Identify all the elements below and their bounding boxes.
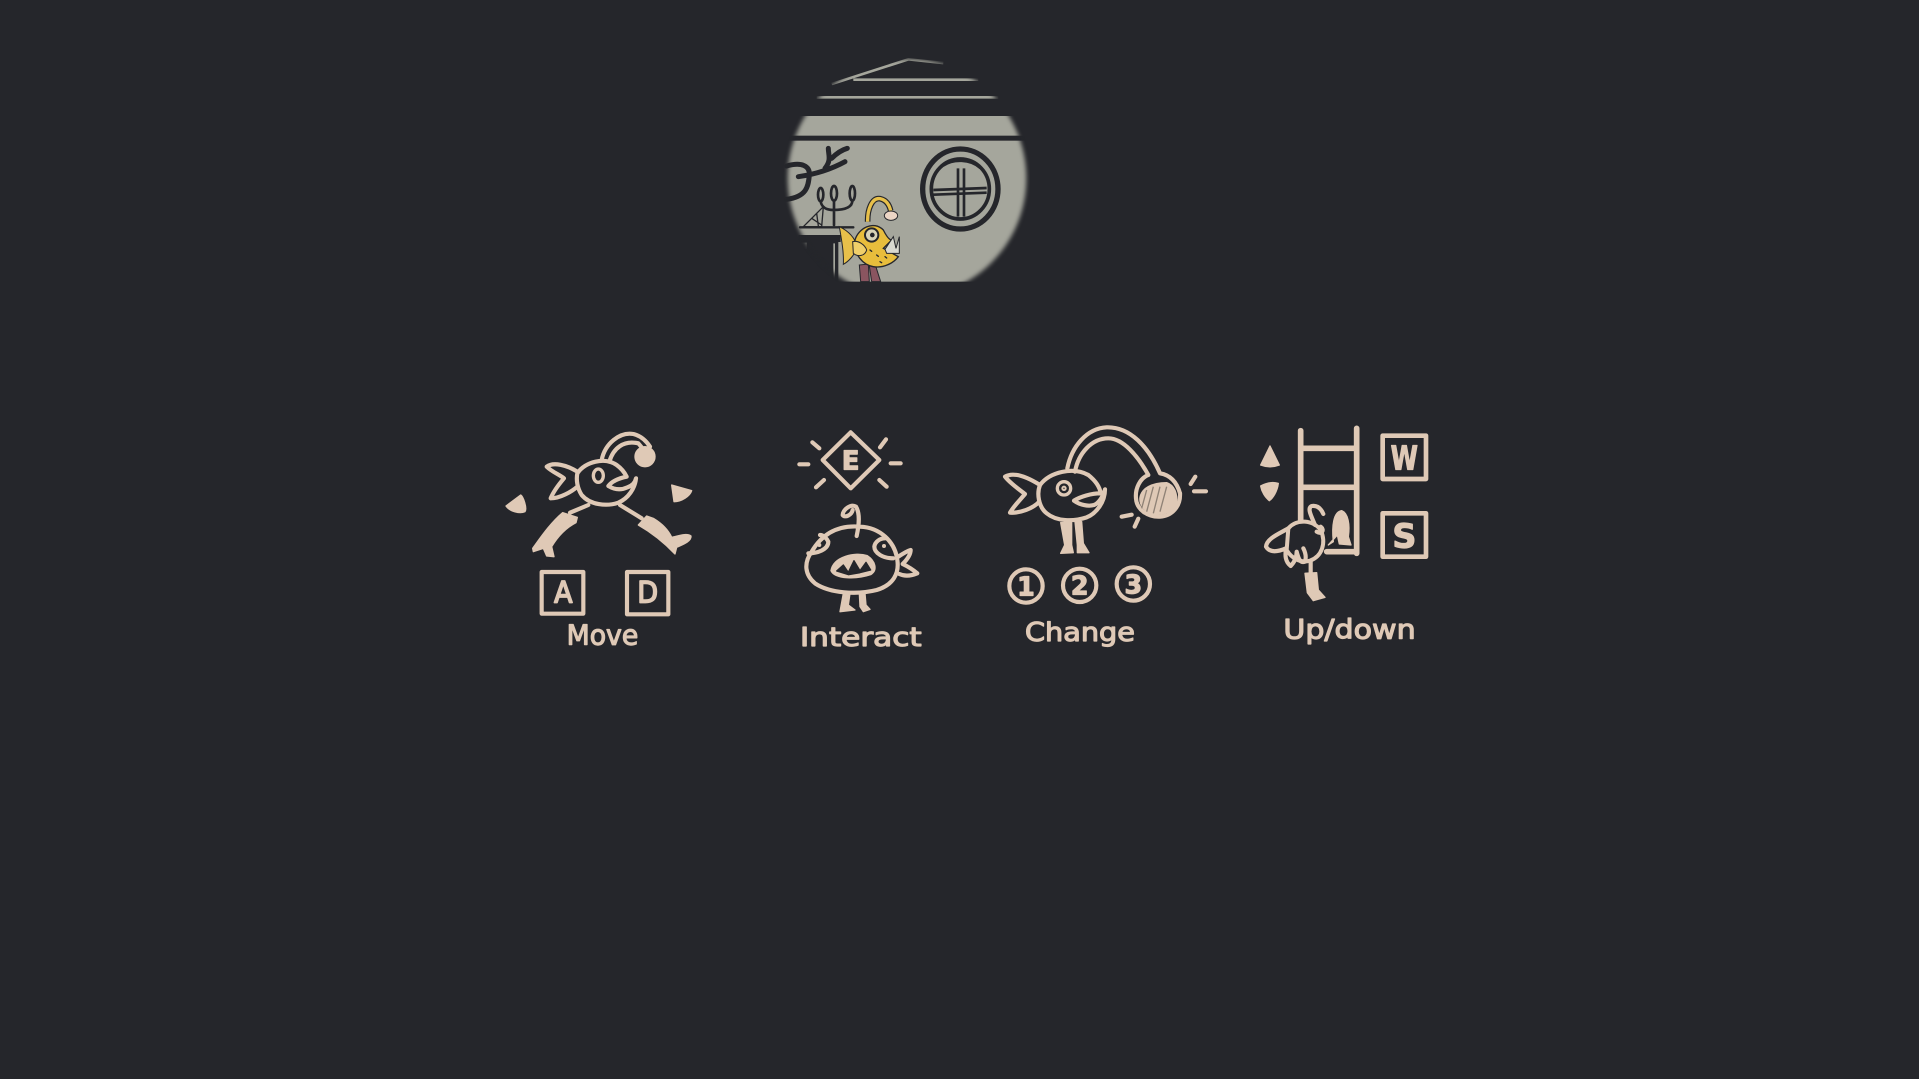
ceiling beam — [783, 136, 1030, 141]
mantel — [798, 226, 854, 228]
label: Up/down: Up/down — [1283, 614, 1416, 645]
number key 3 — [1117, 567, 1150, 601]
icon: right arrow — [672, 485, 692, 502]
icon: climbing fish — [1266, 506, 1351, 601]
icon: left arrow — [506, 495, 526, 513]
number key 2: 2 — [1071, 571, 1088, 601]
icon: fish with long lure — [1005, 427, 1206, 553]
key A — [542, 572, 583, 614]
panel: Up/down control — [1261, 428, 1426, 645]
number key 1: 1 — [1017, 571, 1035, 601]
icon: front-facing fish — [806, 506, 917, 612]
panel: Change control — [1005, 427, 1206, 647]
key A: A — [554, 576, 572, 610]
number key 1 — [1009, 569, 1043, 603]
key E with rays: E — [842, 446, 860, 476]
icon: ladder — [1301, 428, 1357, 553]
number key 3: 3 — [1125, 569, 1142, 599]
label: Change: Change — [1025, 617, 1135, 647]
icon: up arrow — [1261, 446, 1279, 467]
key D — [627, 572, 668, 614]
label: Interact: Interact — [800, 622, 922, 652]
wall — [783, 116, 1030, 282]
key E with rays — [799, 432, 901, 488]
panel: Interact control — [799, 432, 922, 652]
key S: S — [1392, 516, 1416, 555]
panel: game scene spotlight — [783, 59, 1030, 282]
key W: W — [1391, 438, 1418, 477]
roof lines — [817, 59, 998, 97]
number key 2 — [1063, 569, 1096, 602]
icon: down arrow — [1261, 483, 1278, 501]
round window — [923, 149, 998, 229]
key D: D — [637, 576, 658, 610]
icon: yellow anglerfish — [839, 199, 899, 282]
icon: running anglerfish — [533, 434, 691, 557]
branch decoration — [787, 148, 847, 199]
candelabra — [803, 186, 855, 227]
key S — [1383, 513, 1426, 557]
label: Move: Move — [567, 620, 638, 651]
panel: Move control — [506, 434, 692, 651]
